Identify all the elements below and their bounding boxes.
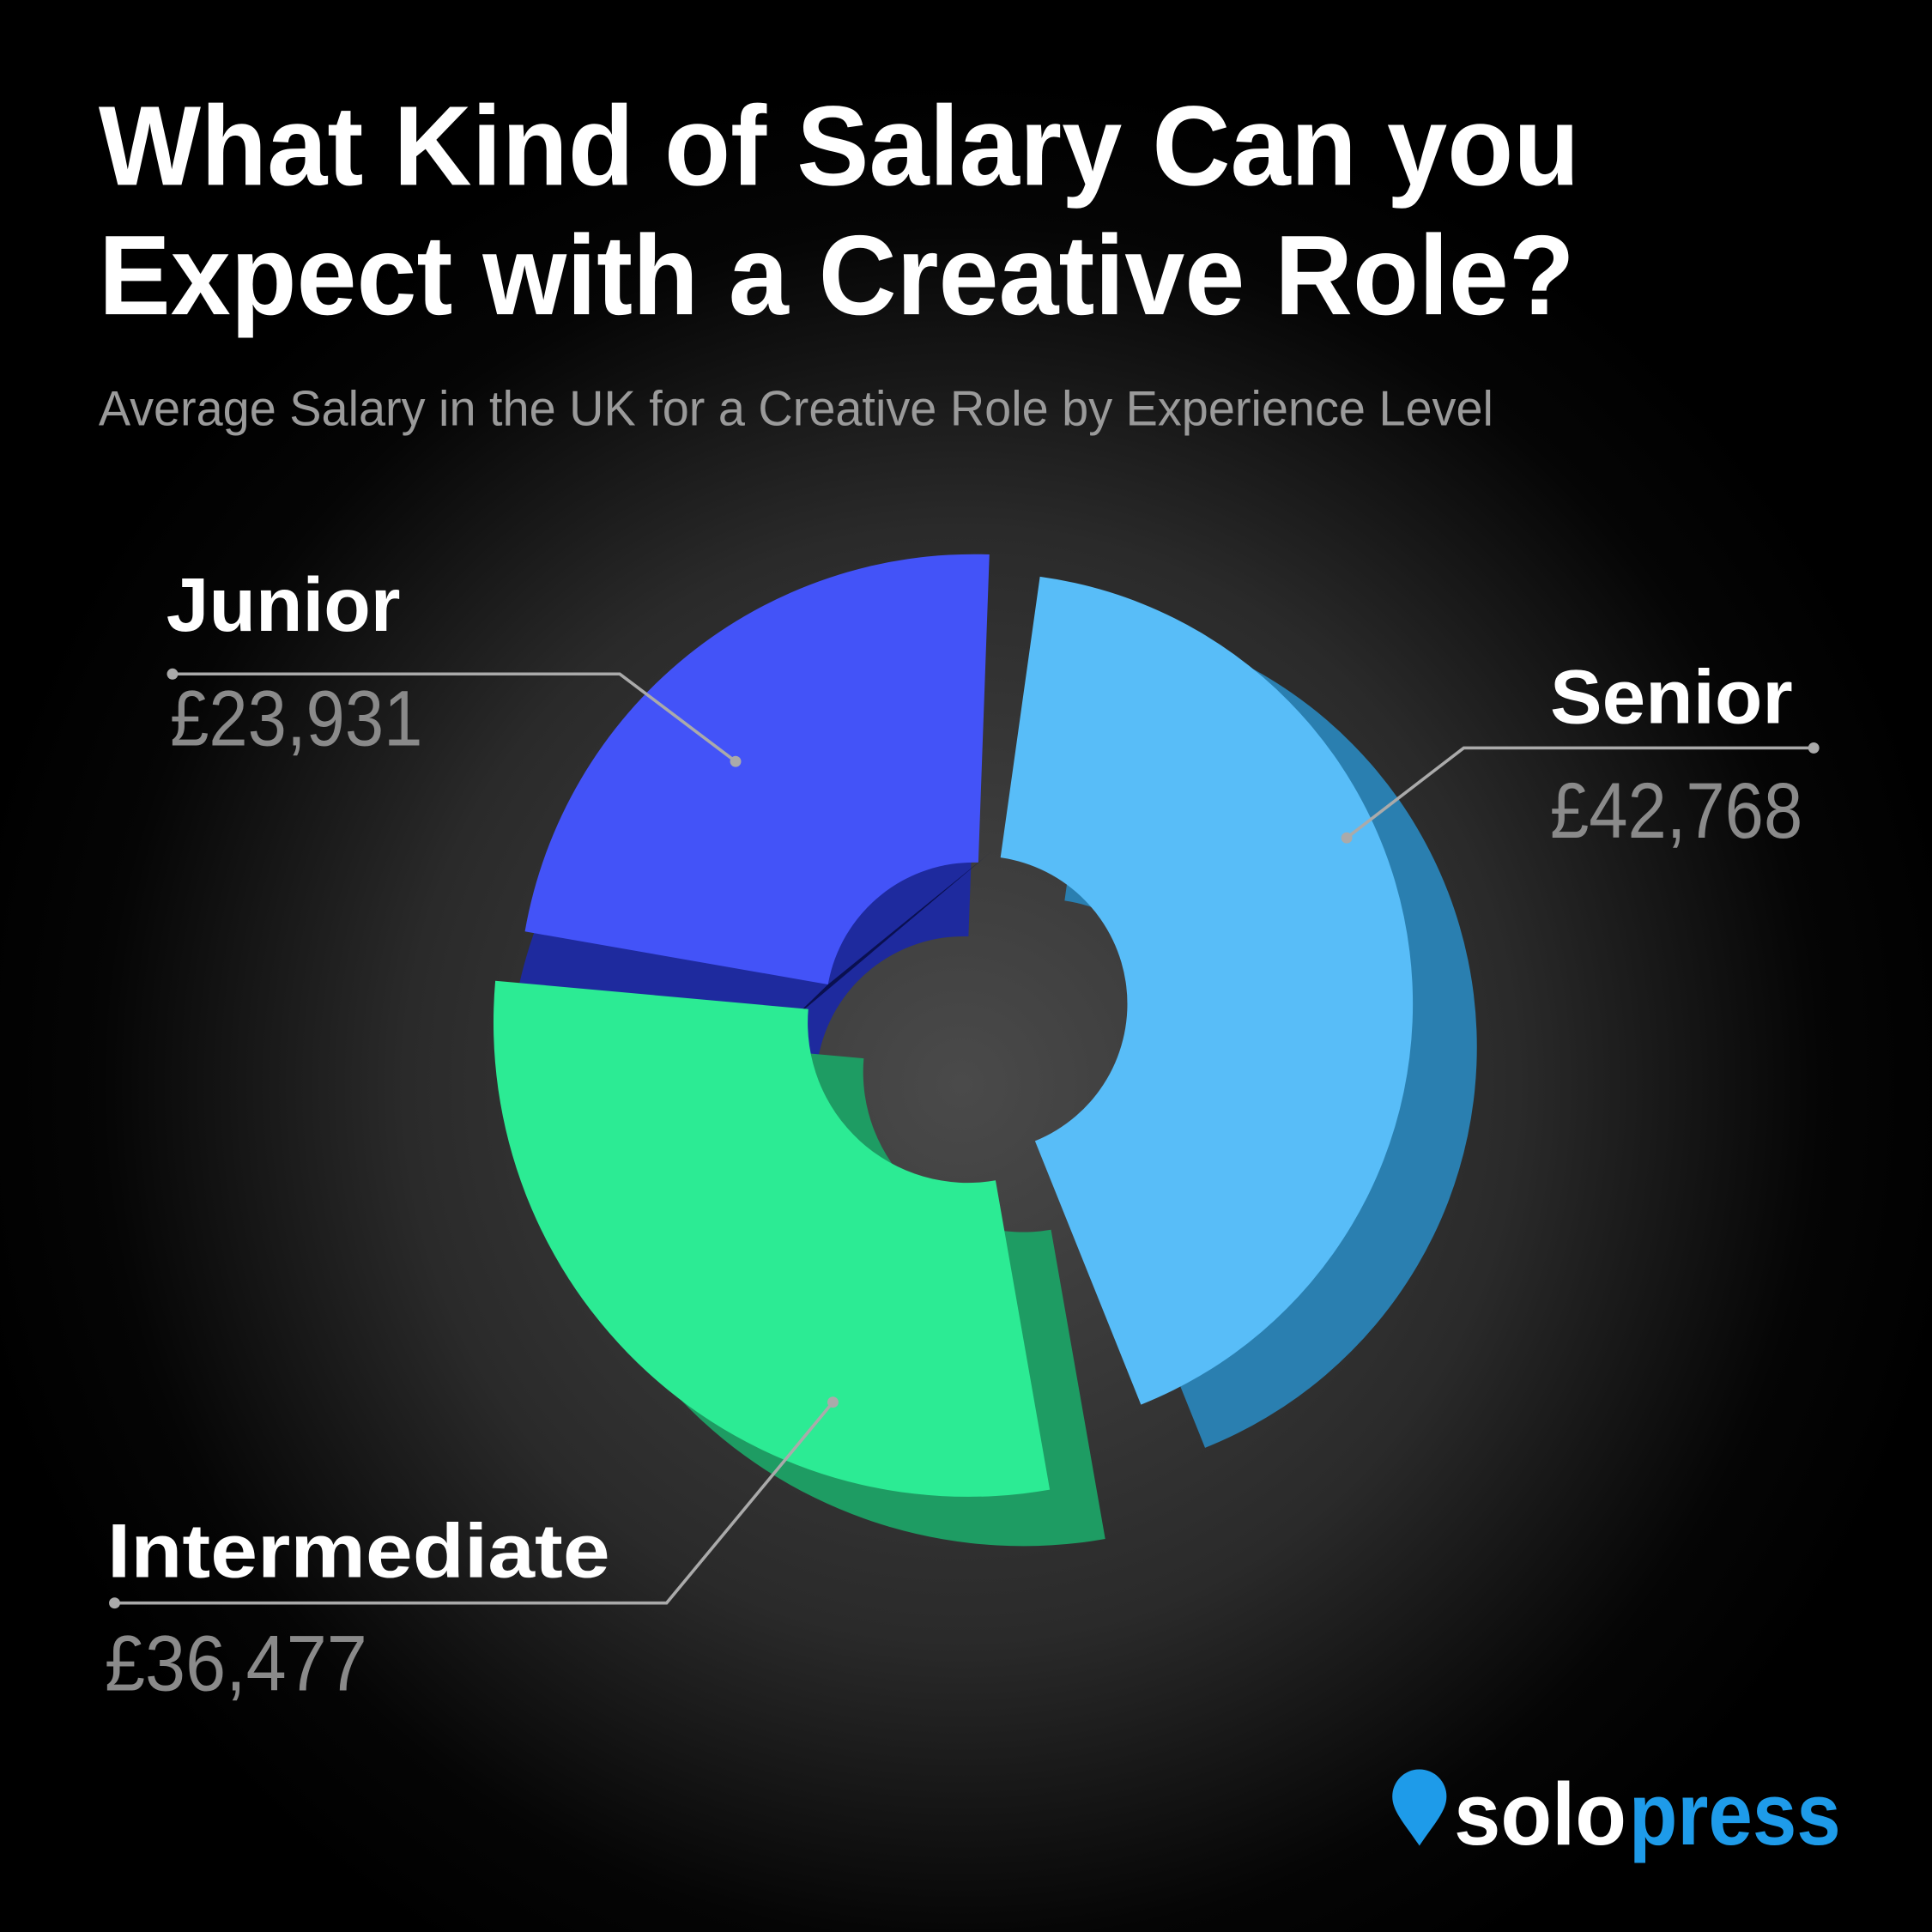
segment: senior (1001, 577, 1477, 1448)
callout: junior: Junior (167, 561, 401, 647)
callout: intermediate: £36,477 (105, 1620, 367, 1708)
title: What Kind of Salary Can you (99, 82, 1579, 209)
callout: senior: Senior (1550, 654, 1793, 740)
segment: intermediate (494, 981, 1105, 1546)
callout: senior (1341, 654, 1820, 855)
callout: senior: £42,768 (1550, 767, 1802, 855)
subtitle: Average Salary in the UK for a Creative Role by Experience Level (99, 381, 1493, 436)
callout: intermediate: Intermediate (107, 1508, 610, 1594)
callout: junior (167, 561, 742, 767)
segment: junior (515, 554, 993, 1058)
callout: junior: £23,931 (170, 675, 422, 763)
logo: solopress (1392, 1764, 1841, 1863)
donut chart (494, 554, 1477, 1546)
title (99, 82, 1579, 338)
callout: intermediate (105, 1396, 839, 1708)
logo: solopress: press (1629, 1764, 1841, 1863)
icon: pin (1392, 1770, 1446, 1846)
title: Expect with a Creative Role? (99, 211, 1575, 338)
logo: solopress: solo (1454, 1764, 1626, 1863)
